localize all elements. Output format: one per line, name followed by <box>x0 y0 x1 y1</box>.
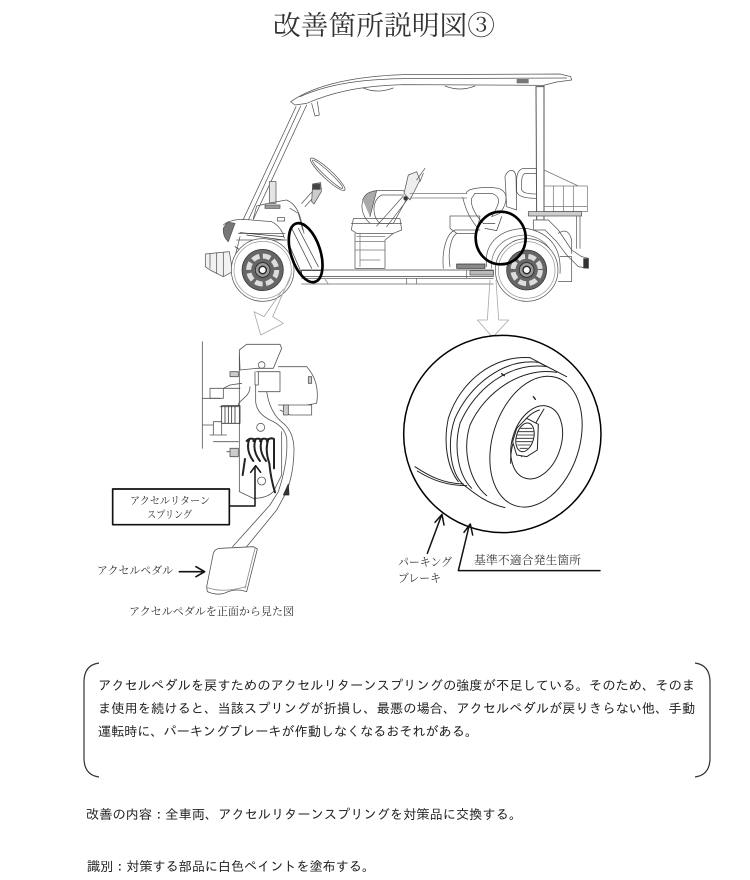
front pillar <box>243 105 307 219</box>
leader: nonconformity <box>458 524 600 571</box>
highlight circle: accelerator <box>282 219 329 286</box>
arrow: to brake <box>477 280 509 337</box>
brake cable <box>415 467 467 486</box>
rear pillar <box>536 86 544 220</box>
rear wheel <box>495 239 558 301</box>
label: pedal: アクセルペダル <box>97 564 173 577</box>
pillar detail in circle <box>290 228 322 273</box>
front seat <box>351 168 425 268</box>
front body <box>205 200 304 277</box>
title: 改善箇所説明図③ <box>273 11 495 41</box>
bracket panel <box>84 663 710 777</box>
arrow: pedal <box>179 567 205 577</box>
drum body <box>450 362 538 484</box>
label: nonconformity location: 基準不適合発生箇所 <box>474 553 582 567</box>
rear body <box>486 220 589 282</box>
label: return spring: アクセルリターン <box>130 495 210 507</box>
pedal pad <box>207 547 257 594</box>
rear basket <box>528 170 587 248</box>
label: parking brake: パーキング <box>398 556 452 569</box>
illustration: accelerator pedal <box>113 342 317 594</box>
illustration: parking brake detail <box>404 335 601 571</box>
identification text: 識別：対策する部品に白色ペイントを塗布する。 <box>87 859 375 874</box>
callout box <box>113 489 229 525</box>
label: spring line 2: スプリング <box>147 509 192 521</box>
pedal arm <box>233 385 287 547</box>
illustration: golf cart side view <box>205 74 589 337</box>
improvement text: 改善の内容：全車両、アクセルリターンスプリングを対策品に交換する。 <box>86 807 522 822</box>
hub <box>513 418 538 457</box>
outer circle <box>404 335 601 533</box>
rear rail <box>410 193 467 198</box>
bracket <box>239 344 282 498</box>
inner hole <box>502 399 571 486</box>
floor board <box>302 264 493 284</box>
description text: ま使用を続けると、当該スプリングが折損し、最悪の場合、アクセルペダルが戻りきらない他、手動 <box>98 701 695 716</box>
arrow: return spring callout <box>229 466 261 506</box>
highlight circle: brake <box>476 212 526 264</box>
steering wheel <box>269 155 348 207</box>
description text: アクセルペダルを戻すためのアクセルリターンスプリングの強度が不足している。そのため、そのま <box>98 678 695 693</box>
front wheel <box>231 239 294 301</box>
caption: pedal view: アクセルペダルを正面から見た図 <box>129 605 294 618</box>
label: brake: ブレーキ <box>398 572 441 585</box>
arrow: to pedal <box>254 273 292 335</box>
return spring <box>243 438 275 492</box>
description text: 運転時に、パーキングブレーキが作動しなくなるおそれがある。 <box>98 724 478 739</box>
arrow: parking brake <box>427 514 444 553</box>
rear seat <box>443 168 537 268</box>
small spring <box>222 406 240 423</box>
roof <box>291 74 572 105</box>
description text <box>98 678 695 739</box>
